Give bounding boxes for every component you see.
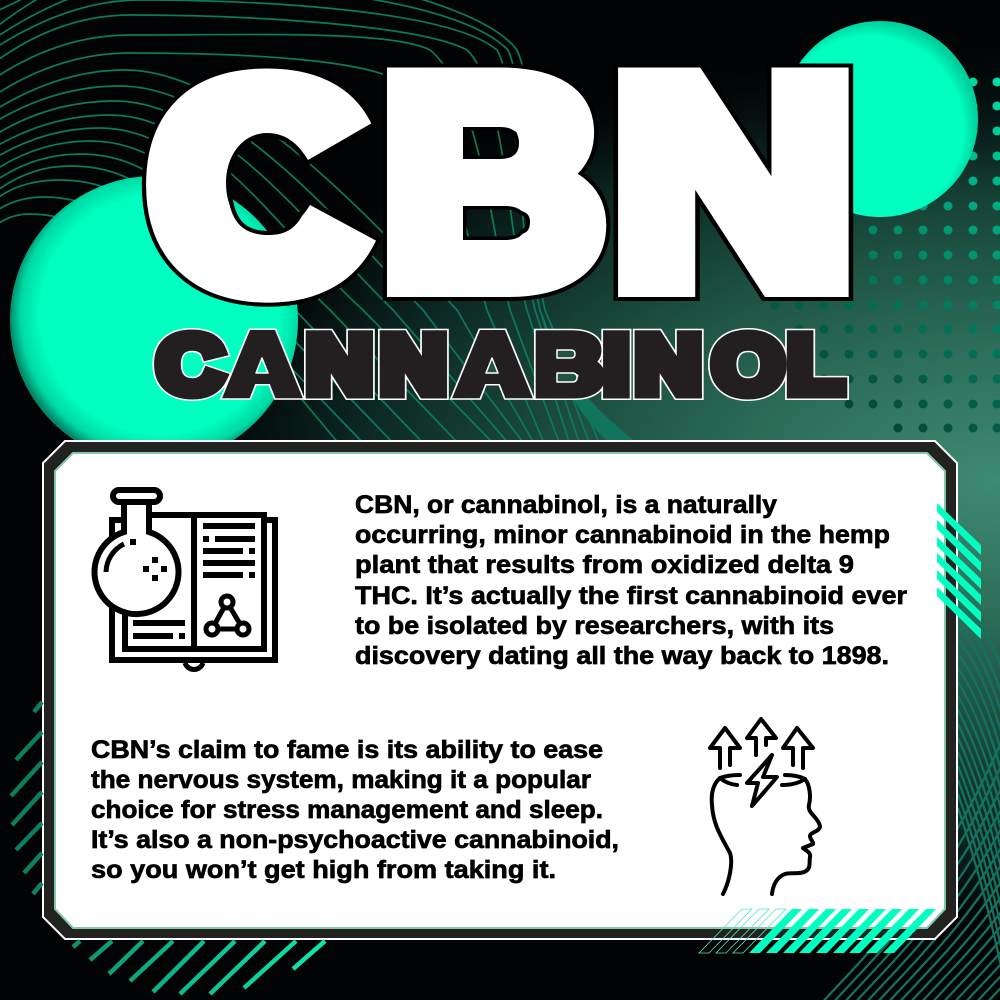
title: CBN: C — [153, 29, 368, 342]
title: CBN: B — [382, 20, 604, 344]
subtitle: CANNABINOL: CANNABINOL — [157, 319, 843, 410]
stripes: bottom edge — [73, 941, 325, 994]
title: CBN: N — [613, 20, 854, 344]
subtitle: CANNABINOL: CANNABINOL — [157, 319, 843, 410]
text block: intro paragraph — [355, 491, 907, 670]
text block: effects paragraph: It’s also a non-psychoactive cannabinoid, — [91, 826, 619, 854]
text block: effects paragraph: CBN’s claim to fame is its ability to ease — [91, 736, 603, 764]
concentric line pattern: lower right — [820, 600, 1000, 1000]
text block: effects paragraph: so you won’t get high from taking it. — [91, 856, 556, 884]
panel: main card — [43, 441, 957, 939]
title: CBN: N — [613, 20, 854, 344]
dot grid — [770, 78, 1000, 432]
stripes: bottom right accent — [699, 909, 936, 953]
icon: head with lightning and arrows — [710, 719, 820, 894]
text block: effects paragraph: the nervous system, making it a popular — [91, 766, 591, 794]
circle: green top right — [782, 21, 978, 217]
text block: intro paragraph: occurring, minor cannabinoid in the hemp — [355, 521, 890, 549]
icon: flask and book — [94, 490, 275, 669]
text block: intro paragraph: plant that results from oxidized delta 9 — [355, 551, 854, 579]
text block: effects paragraph: choice for stress management and sleep. — [91, 796, 603, 824]
text block: intro paragraph: CBN, or cannabinol, is a naturally — [355, 491, 777, 519]
text block: intro paragraph: THC. It’s actually the first cannabinoid ever — [355, 582, 907, 610]
title: CBN: C — [153, 29, 368, 342]
concentric line pattern: top left — [0, 0, 600, 445]
title: CBN: B — [382, 20, 604, 344]
title: CBN — [142, 64, 854, 307]
stripes: right accent — [937, 503, 981, 639]
text block: intro paragraph: discovery dating all the way back to 1898. — [355, 642, 889, 670]
text block: intro paragraph: to be isolated by researchers, with its — [355, 612, 834, 640]
text block: effects paragraph — [91, 736, 619, 884]
circle: large green left — [10, 176, 298, 464]
stripes: left edge — [11, 702, 42, 894]
